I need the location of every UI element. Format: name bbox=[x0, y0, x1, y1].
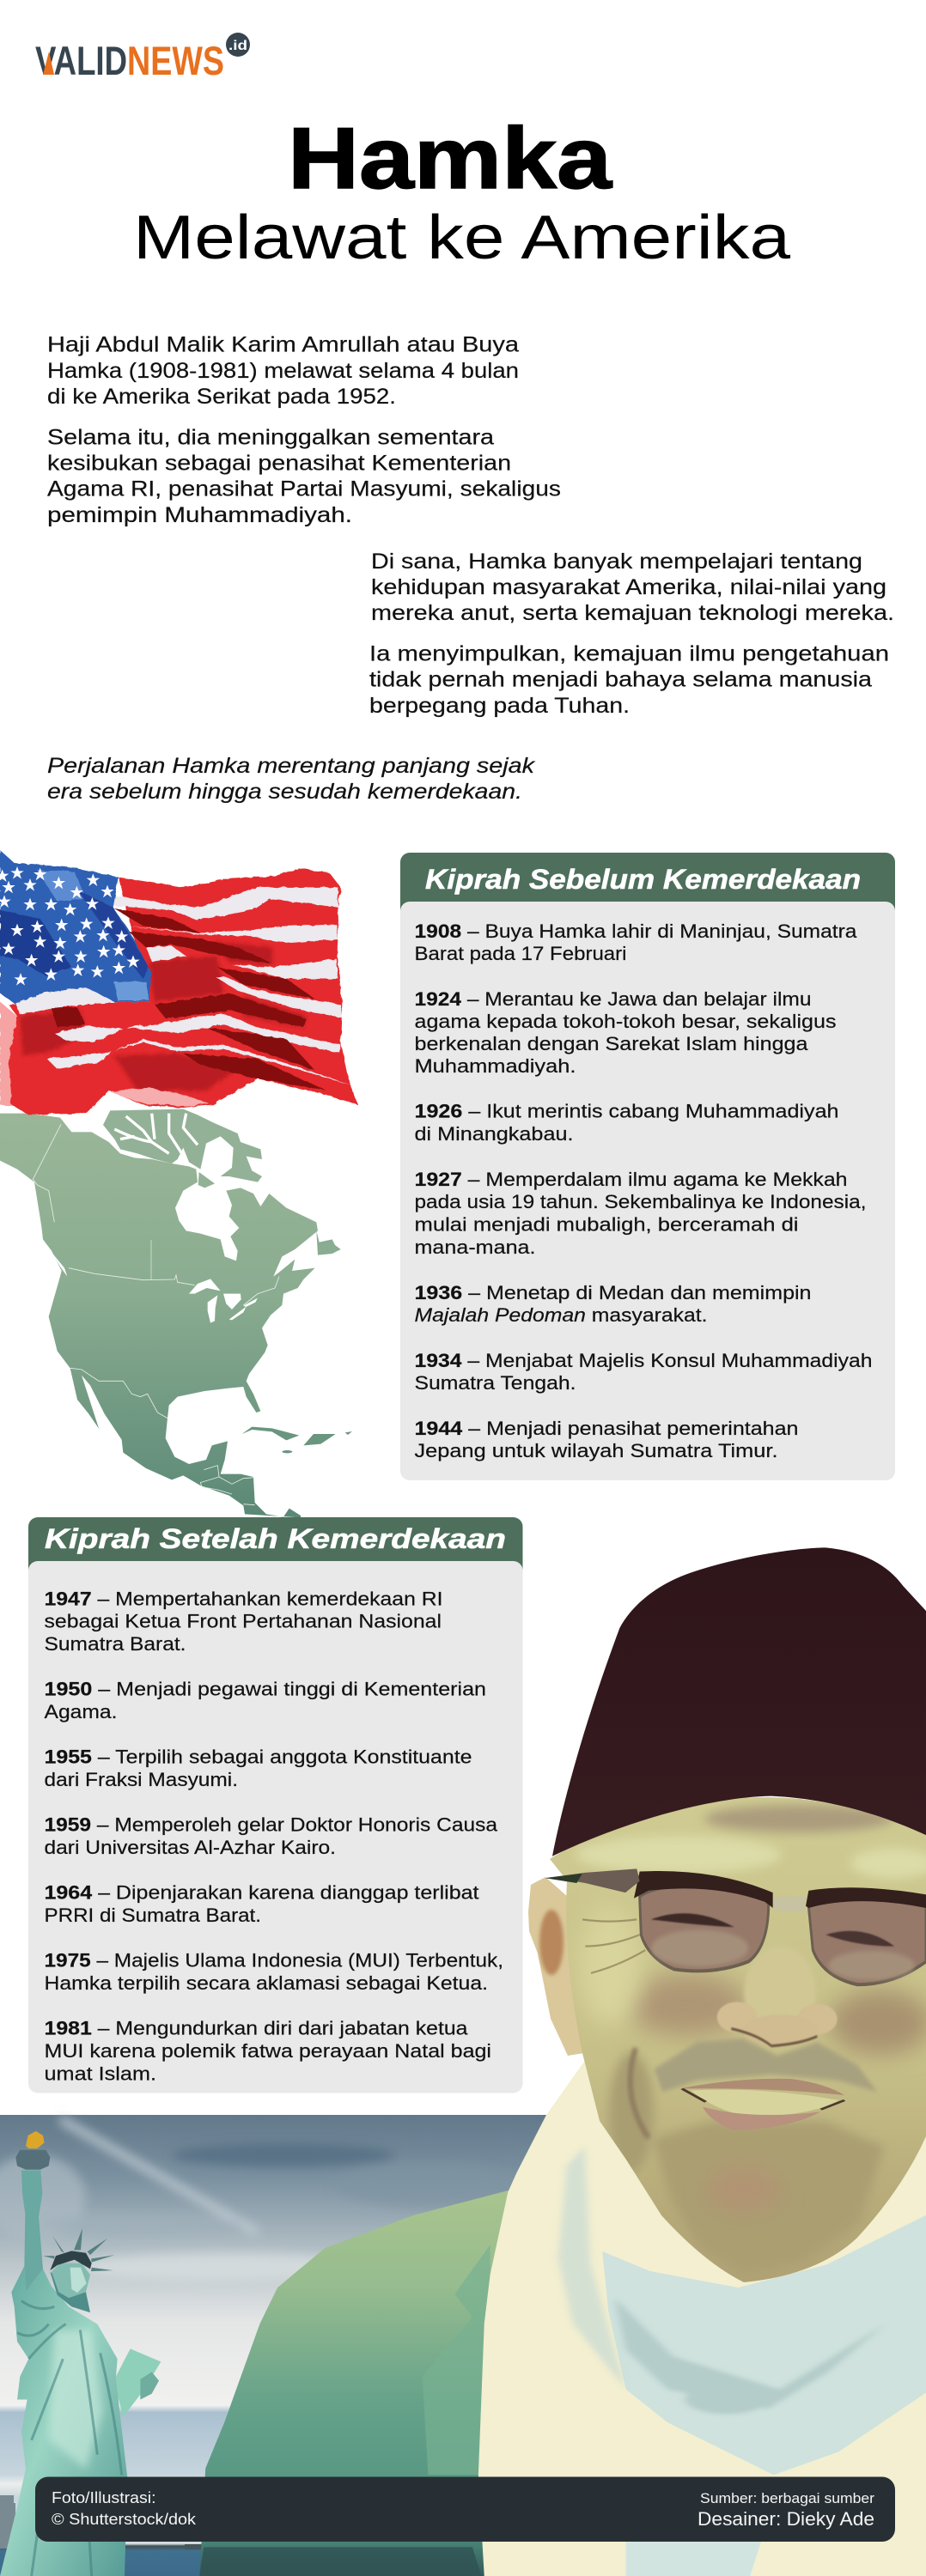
entry 1908: 1908 – Buya Hamka lahir di Maninjau, Sumatra bbox=[414, 920, 857, 942]
intro text: paragraph 1: di ke Amerika Serikat pada 1952. bbox=[47, 385, 396, 409]
entry 1975: Hamka terpilih secara aklamasi sebagai Ketua. bbox=[45, 1972, 488, 1994]
entry 1975: 1975 – Majelis Ulama Indonesia (MUI) Terbentuk, bbox=[45, 1949, 503, 1971]
intro text: italic closing bbox=[47, 754, 536, 804]
intro text: paragraph 1: Hamka (1908-1981) melawat selama 4 bulan bbox=[47, 359, 519, 383]
entry 1924: berkenalan dengan Sarekat Islam hingga bbox=[414, 1033, 808, 1054]
statue: robe folds bbox=[17, 2301, 122, 2576]
entry 1924: 1924 – Merantau ke Jawa dan belajar ilmu bbox=[414, 988, 811, 1010]
logo: Validnews.id: VALID bbox=[35, 38, 127, 83]
entry 1947: sebagai Ketua Front Pertahanan Nasional bbox=[45, 1611, 442, 1631]
teeth bbox=[691, 2090, 838, 2117]
logo: Validnews.id bbox=[35, 33, 250, 83]
intro text: paragraph 4: tidak pernah menjadi bahaya selama manusia bbox=[369, 668, 872, 692]
flag: dark red stripes bbox=[52, 908, 326, 1091]
intro text: paragraph 2 bbox=[47, 426, 561, 527]
entry 1955 bbox=[45, 1747, 472, 1790]
entry 1964: PRRI di Sumatra Barat. bbox=[45, 1905, 261, 1926]
entry 1944: 1944 – Menjadi penasihat pemerintahan bbox=[414, 1418, 799, 1439]
title: Hamka bbox=[288, 111, 612, 207]
statue: face bbox=[52, 2263, 90, 2298]
intro text: paragraph 4: Ia menyimpulkan, kemajuan ilmu pengetahuan bbox=[369, 642, 889, 666]
Statue of Liberty bbox=[0, 2131, 161, 2576]
flag: white band under canton bbox=[15, 987, 114, 1015]
footer bar bbox=[35, 2476, 895, 2542]
entry 1927: mana-mana. bbox=[414, 1236, 536, 1258]
face base bbox=[533, 1786, 926, 2293]
entry 1959: 1959 – Memperoleh gelar Doktor Honoris Causa bbox=[45, 1814, 498, 1836]
panel heading: Kiprah Sebelum Kemerdekaan bbox=[425, 864, 861, 895]
map: great lakes bbox=[189, 1279, 258, 1323]
entry 1944 bbox=[414, 1418, 799, 1461]
portrait of Hamka: facial details bbox=[545, 1547, 926, 2092]
entry 1964 bbox=[45, 1882, 479, 1926]
entry 1934: Sumatra Tengah. bbox=[414, 1372, 576, 1394]
sky and harbor background bbox=[0, 2115, 926, 2576]
source and designer credit: Sumber: berbagai sumber bbox=[700, 2491, 875, 2506]
statue: crown rays bbox=[43, 2228, 114, 2271]
watercolor American flag bbox=[0, 850, 358, 1115]
panel: Kiprah Sebelum Kemerdekaan bbox=[400, 853, 895, 1480]
intro text: paragraph 3: kehidupan masyarakat Amerika, nilai-nilai yang bbox=[371, 575, 886, 599]
entry 1924: agama kepada tokoh-tokoh besar, sekaligus bbox=[414, 1011, 837, 1032]
forehead highlight bbox=[576, 1836, 782, 1874]
entry 1908: Barat pada 17 Februari bbox=[414, 943, 627, 964]
fez cap bbox=[552, 1547, 926, 1856]
scarf shadow folds bbox=[614, 2298, 886, 2414]
scarf pale blue wrap bbox=[602, 2215, 926, 2475]
intro text: paragraph 4 bbox=[369, 642, 889, 718]
intro text: paragraph 4: berpegang pada Tuhan. bbox=[369, 694, 630, 718]
eye wrinkles bbox=[582, 1919, 645, 1973]
beard bbox=[655, 2119, 883, 2250]
glasses bridge bbox=[773, 1896, 807, 1911]
portrait of Hamka: face bbox=[533, 1786, 926, 2293]
entry 1947: 1947 – Mempertahankan kemerdekaan RI bbox=[45, 1589, 443, 1609]
intro text: paragraph 2: Selama itu, dia meninggalkan sementara bbox=[47, 426, 494, 450]
cream scarf bbox=[478, 2061, 926, 2576]
glasses top frame bbox=[634, 1871, 773, 1908]
entry 1927 bbox=[414, 1169, 866, 1258]
coat lower shadow bbox=[199, 2547, 481, 2576]
statue: tablet bbox=[116, 2348, 161, 2417]
entry 1927: mulai menjadi mubaligh, berceramah di bbox=[414, 1214, 799, 1235]
flag: blue canton bbox=[0, 850, 152, 1005]
entry 1959: dari Universitas Al-Azhar Kairo. bbox=[45, 1837, 336, 1858]
panel header bbox=[400, 853, 895, 921]
entry 1955: 1955 – Terpilih sebagai anggota Konstituante bbox=[45, 1747, 472, 1767]
intro text: paragraph 1 bbox=[47, 333, 519, 409]
map: Caribbean islands bbox=[242, 1427, 352, 1453]
entry 1975 bbox=[45, 1949, 503, 1994]
logo: Validnews.id: .id bbox=[228, 39, 247, 53]
photo credit: © Shutterstock/dok bbox=[52, 2511, 197, 2528]
entry 1950: 1950 – Menjadi pegawai tinggi di Kementerian bbox=[45, 1678, 486, 1700]
entry 1981: umat Islam. bbox=[45, 2063, 156, 2085]
map: borders bbox=[33, 1124, 279, 1505]
portrait of Hamka: ear bbox=[528, 1877, 584, 2056]
panel body bbox=[28, 1561, 522, 2093]
flag: stars bbox=[0, 866, 140, 986]
map: arctic islands bbox=[103, 1109, 262, 1182]
entry 1924 bbox=[414, 988, 837, 1077]
entry 1934: 1934 – Menjabat Majelis Konsul Muhammadiyah bbox=[414, 1350, 873, 1371]
map: Newfoundland bbox=[316, 1230, 341, 1255]
intro text: paragraph 2: Agama RI, penasihat Partai Masyumi, sekaligus bbox=[47, 477, 561, 501]
forehead shadow bbox=[704, 1805, 893, 1832]
map of North America bbox=[0, 1109, 352, 1517]
left cheek light bbox=[579, 1906, 641, 2026]
statue: crown band bbox=[50, 2251, 92, 2270]
map: arctic channels bbox=[114, 1114, 221, 1182]
statue: hand bbox=[140, 2372, 159, 2399]
entry 1926 bbox=[414, 1101, 838, 1145]
intro text: paragraph 3: mereka anut, serta kemajuan teknologi mereka. bbox=[371, 601, 894, 625]
statue: torch platform bbox=[15, 2150, 50, 2170]
flag: white stripes bbox=[47, 887, 350, 1084]
map: mainland bbox=[0, 1114, 318, 1517]
intro text: paragraph 3 bbox=[371, 550, 894, 625]
intro text: paragraph 1: Haji Abdul Malik Karim Amrullah atau Buya bbox=[47, 333, 519, 357]
logo: Validnews.id: NEWS bbox=[127, 38, 224, 83]
flag: pale wash bbox=[0, 1002, 40, 1108]
entry 1950 bbox=[45, 1678, 486, 1722]
entry 1981: 1981 – Mengundurkan diri dari jabatan ketua bbox=[45, 2018, 468, 2038]
entry 1959 bbox=[45, 1814, 498, 1858]
statue: raised arm bbox=[21, 2170, 46, 2292]
nose bbox=[717, 1947, 838, 2047]
entry 1936: 1936 – Menetap di Medan dan memimpin bbox=[414, 1282, 811, 1303]
panel header bbox=[28, 1517, 522, 1586]
map: Vancouver island bbox=[52, 1252, 67, 1277]
portrait of Hamka: mouth bbox=[679, 2079, 844, 2129]
entry 1947: Sumatra Barat. bbox=[45, 1633, 186, 1655]
right lens bbox=[808, 1899, 926, 1984]
scarf lower blue bbox=[626, 2485, 768, 2576]
statue: robe light bbox=[49, 2330, 103, 2470]
entry 1981 bbox=[45, 2018, 491, 2085]
flag: pale bottom wash bbox=[110, 1088, 209, 1106]
statue: flame bbox=[26, 2131, 45, 2148]
title: Melawat ke Amerika bbox=[133, 204, 791, 272]
entry 1944: Jepang untuk wilayah Sumatra Timur. bbox=[414, 1440, 778, 1461]
scarf left fold bbox=[558, 2147, 626, 2390]
flag: deep red washes bbox=[20, 942, 307, 1091]
coat lapel bbox=[423, 2245, 490, 2475]
intro text: paragraph 2: pemimpin Muhammadiyah. bbox=[47, 503, 352, 527]
entry 1936 bbox=[414, 1282, 811, 1326]
upper lip bbox=[679, 2079, 844, 2095]
lower lip bbox=[703, 2107, 821, 2129]
mouth corners bbox=[682, 2089, 844, 2110]
entry 1955: dari Fraksi Masyumi. bbox=[45, 1769, 238, 1790]
portrait of Hamka: body and scarf bbox=[199, 2061, 926, 2576]
entry 1926: di Minangkabau. bbox=[414, 1123, 574, 1145]
entry 1964: 1964 – Dipenjarakan karena dianggap terlibat bbox=[45, 1882, 479, 1903]
entry 1908 bbox=[414, 920, 857, 964]
entry 1926: 1926 – Ikut merintis cabang Muhammadiyah bbox=[414, 1101, 838, 1121]
cheek shadows bbox=[627, 1974, 747, 2036]
statue: neck and hair bbox=[50, 2272, 90, 2312]
intro text: italic closing: Perjalanan Hamka merentang panjang sejak bbox=[47, 754, 536, 778]
map: Baffin white bays bbox=[218, 1150, 224, 1160]
map: Hudson bay islands bbox=[198, 1172, 215, 1188]
distant skyline bbox=[0, 2495, 296, 2549]
entry 1934 bbox=[414, 1350, 873, 1394]
panel: Kiprah Setelah Kemerdekaan bbox=[28, 1517, 522, 2093]
panel heading: Kiprah Setelah Kemerdekaan bbox=[45, 1523, 506, 1554]
statue: robe bbox=[0, 2266, 127, 2576]
entry 1924: Muhammadiyah. bbox=[414, 1055, 576, 1077]
intro text: paragraph 3: Di sana, Hamka banyak mempelajari tentang bbox=[371, 550, 862, 574]
intro text: paragraph 2: kesibukan sebagai penasihat Kementerian bbox=[47, 452, 511, 476]
entry 1950: Agama. bbox=[45, 1701, 117, 1722]
clouds and contrails bbox=[0, 2119, 524, 2281]
smile line bbox=[631, 2048, 649, 2138]
photo credit: Foto/Illustrasi: bbox=[52, 2489, 156, 2506]
entry 1927: 1927 – Memperdalam ilmu agama ke Mekkah bbox=[414, 1169, 847, 1190]
mustache bbox=[654, 2038, 877, 2092]
flag: red body bbox=[9, 869, 358, 1115]
glasses temple arm bbox=[545, 1868, 640, 1893]
entry 1947 bbox=[45, 1589, 443, 1655]
entry 1936: Majalah Pedoman masyarakat. bbox=[414, 1304, 708, 1326]
panel body bbox=[400, 902, 895, 1480]
photo credit bbox=[52, 2489, 197, 2528]
source and designer credit: Desainer: Dieky Ade bbox=[698, 2508, 874, 2530]
coat bbox=[199, 2190, 591, 2576]
entry 1927: pada usia 19 tahun. Sekembalinya ke Indonesia, bbox=[414, 1191, 866, 1212]
source and designer credit bbox=[698, 2491, 875, 2530]
title bbox=[133, 111, 791, 272]
left lens bbox=[640, 1886, 769, 1971]
intro text: italic closing: era sebelum hingga sesudah kemerdekaan. bbox=[47, 780, 522, 804]
entry 1981: MUI karena polemik fatwa perayaan Natal bagi bbox=[45, 2040, 491, 2062]
